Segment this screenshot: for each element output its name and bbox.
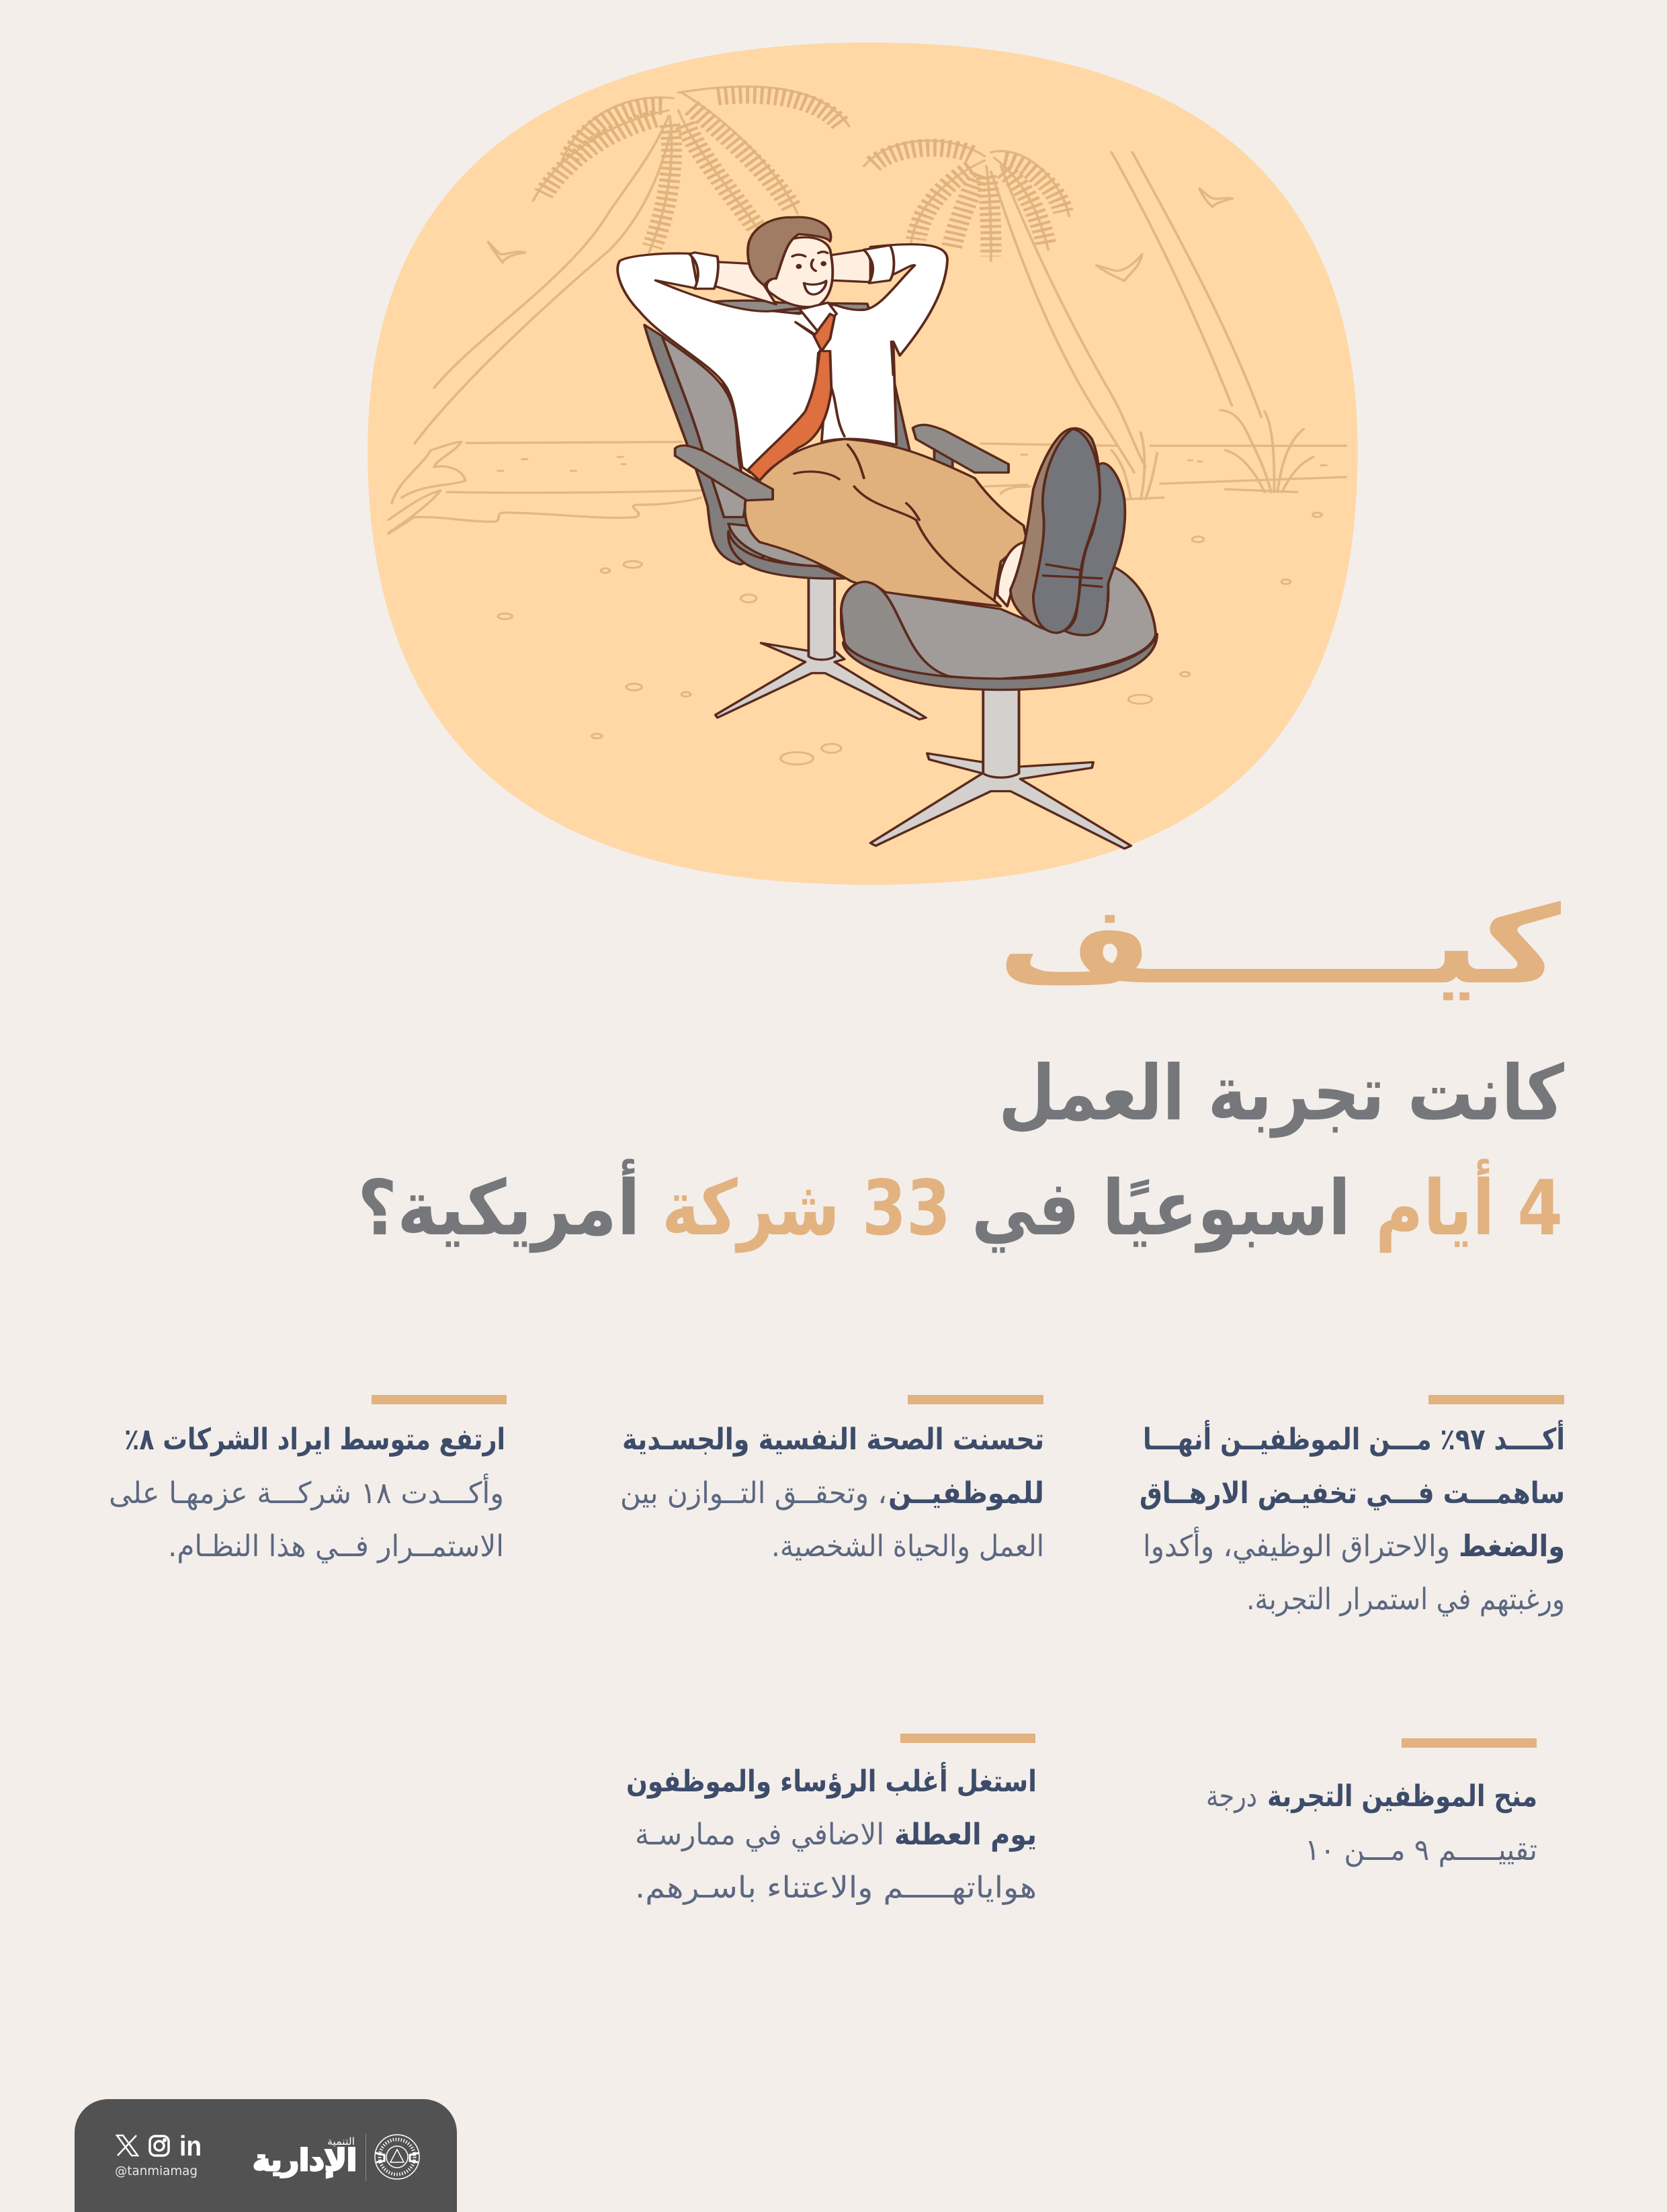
- accent bar: [1428, 1395, 1564, 1404]
- stool stem and base: [871, 687, 1131, 849]
- finding text: [620, 1422, 1044, 1564]
- finding: rating: [1206, 1738, 1537, 1867]
- sock: [998, 542, 1025, 606]
- beach scenery: [388, 87, 1346, 765]
- palm tree left: [415, 87, 849, 443]
- finding: wellbeing: [620, 1395, 1044, 1564]
- footstool: [841, 564, 1157, 849]
- chair right side of back: [892, 372, 911, 456]
- icon: instagram: [150, 2136, 169, 2156]
- finding text: تقييـــــم ٩ مـــن ١٠: [1305, 1833, 1537, 1867]
- forearms: [714, 250, 873, 304]
- highlight: 33 companies: 33 شركة: [662, 1164, 951, 1253]
- finding text: الاضافي في ممارسـة: [635, 1818, 884, 1852]
- finding text: للموظفيــن: [888, 1476, 1044, 1511]
- shoreline: [388, 442, 1346, 534]
- sand-coloured blob background: [368, 42, 1358, 885]
- stool rim: [843, 634, 1157, 690]
- illustration: relaxed employee on the beach: [368, 42, 1358, 885]
- finding text: ، وتحقــق التــوازن بين: [620, 1476, 887, 1511]
- birds: [488, 188, 1232, 281]
- hair: [748, 217, 831, 286]
- beach plants: [388, 410, 1314, 533]
- finding text: ارتفع متوسط ايراد الشركات ٨٪: [124, 1422, 505, 1457]
- finding text: والضغط: [1459, 1529, 1565, 1564]
- social handle: @tanmiamag: [115, 2164, 198, 2178]
- finding text: والاحتراق الوظيفي، وأكدوا: [1143, 1527, 1450, 1564]
- shirt: [617, 245, 947, 472]
- accent bar: [900, 1734, 1035, 1743]
- highlight: 4 days: 4 أيام: [1375, 1158, 1563, 1253]
- finding text: استغل أغلب الرؤساء والموظفون: [626, 1762, 1037, 1799]
- tie: [748, 314, 835, 484]
- left armrest: [675, 445, 773, 501]
- chair headrest: [704, 300, 869, 314]
- stool cushion fold: [841, 582, 952, 677]
- palm trunks right: [1111, 153, 1261, 417]
- finding: 97 percent: [1140, 1395, 1565, 1617]
- finding text: هواياتهـــــم والاعتناء باسـرهم.: [635, 1871, 1037, 1905]
- footer panel: [75, 2099, 457, 2212]
- trousers: [745, 439, 1027, 606]
- finding: revenue: [109, 1395, 507, 1564]
- back shoe: [1060, 463, 1125, 635]
- logo wordmark: التنمية: [327, 2135, 355, 2147]
- palm tree centre: [864, 140, 1146, 472]
- eyes: [796, 261, 826, 269]
- office chair: [644, 300, 1009, 720]
- emblem: [375, 2135, 419, 2179]
- heading line 1: كانت تجربة العمل: [998, 1049, 1564, 1138]
- accent bar: [1402, 1738, 1537, 1748]
- chair stem and base: [716, 576, 926, 720]
- heading line 2: [357, 1158, 1563, 1253]
- finding text: ورغبتهم في استمرار التجربة.: [1246, 1582, 1565, 1617]
- finding text: يوم العطلة: [894, 1818, 1037, 1852]
- logo wordmark: الإدارية: [253, 2143, 357, 2178]
- American: أمريكية؟: [357, 1158, 640, 1253]
- chair seat cushion: [728, 524, 851, 579]
- finding text: [1140, 1420, 1565, 1617]
- accent bar: [372, 1395, 507, 1404]
- finding text: العمل والحياة الشخصية.: [771, 1529, 1044, 1564]
- finding text: [626, 1762, 1037, 1905]
- title word: كيــــــف: [998, 882, 1562, 1008]
- icon: linkedin: in: [179, 2130, 202, 2162]
- mouth: [804, 281, 826, 294]
- finding text: أكــــد ٩٧٪ مـــن الموظفيــن أنهـــا: [1143, 1420, 1565, 1457]
- weekly in: اسبوعيًا في: [972, 1164, 1351, 1253]
- icon: X: [117, 2135, 138, 2156]
- head: [748, 217, 832, 307]
- man: [617, 217, 1027, 606]
- finding text: منح الموظفين التجربة: [1267, 1779, 1537, 1814]
- front shoe sole: [1033, 429, 1100, 633]
- shirt folds: [830, 341, 893, 436]
- face: [767, 237, 832, 307]
- finding text: وأكـــدت ١٨ شركـــة عزمهـا على: [109, 1474, 504, 1511]
- finding text: [1206, 1779, 1537, 1867]
- shirt cuffs: [689, 245, 894, 289]
- shoes: [1011, 428, 1125, 635]
- finding text: ساهمـــت فـــي تخفيـض الارهــاق: [1140, 1476, 1565, 1511]
- finding text: الاستمــرار فــي هذا النظـام.: [168, 1529, 504, 1564]
- right armrest: [913, 425, 1009, 472]
- finding text: [109, 1422, 505, 1564]
- footer background: [75, 2099, 457, 2212]
- stool cushion: [841, 564, 1156, 679]
- chair seat rim: [728, 531, 846, 579]
- collar: [773, 302, 837, 332]
- finding: day off: [626, 1734, 1037, 1905]
- finding text: تحسنت الصحة النفسية والجسـدية: [622, 1422, 1044, 1457]
- accent bar: [908, 1395, 1043, 1404]
- nose and brows: [792, 252, 828, 271]
- heel lines: [1043, 564, 1102, 587]
- pebbles: [498, 455, 1326, 765]
- chair back cushion: [662, 336, 748, 517]
- front shoe upper: [1011, 428, 1099, 632]
- chair back frame: [644, 325, 766, 564]
- finding text: درجة: [1206, 1779, 1257, 1814]
